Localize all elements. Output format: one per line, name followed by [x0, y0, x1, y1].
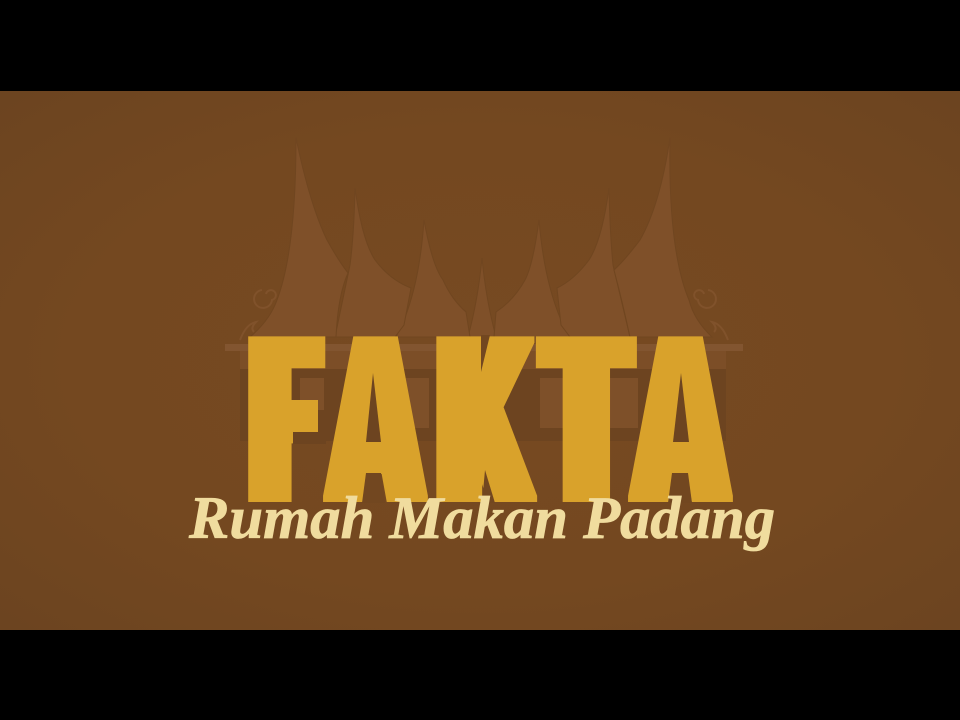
house body	[240, 351, 726, 369]
carved spiral ornaments	[240, 290, 728, 340]
heading: FAKTA: A	[332, 291, 419, 549]
window panels	[300, 378, 638, 428]
heading: FAKTA: A	[637, 291, 724, 549]
heading: FAKTA	[257, 290, 724, 549]
heading: FAKTA: K	[444, 291, 523, 549]
K notches	[481, 335, 495, 503]
icon: Rumah Gadang house silhouette	[225, 138, 743, 441]
subtitle: Rumah Makan Padang: Rumah Makan Padang	[188, 485, 775, 551]
panel: brown background	[0, 91, 960, 630]
roof spires	[250, 138, 712, 337]
heading: FAKTA: F	[257, 290, 314, 549]
F middle arm adjustment	[288, 400, 326, 444]
A crossbars, counters and leg gaps	[355, 373, 704, 503]
heading: FAKTA: T	[550, 291, 623, 549]
house beam	[225, 344, 743, 351]
